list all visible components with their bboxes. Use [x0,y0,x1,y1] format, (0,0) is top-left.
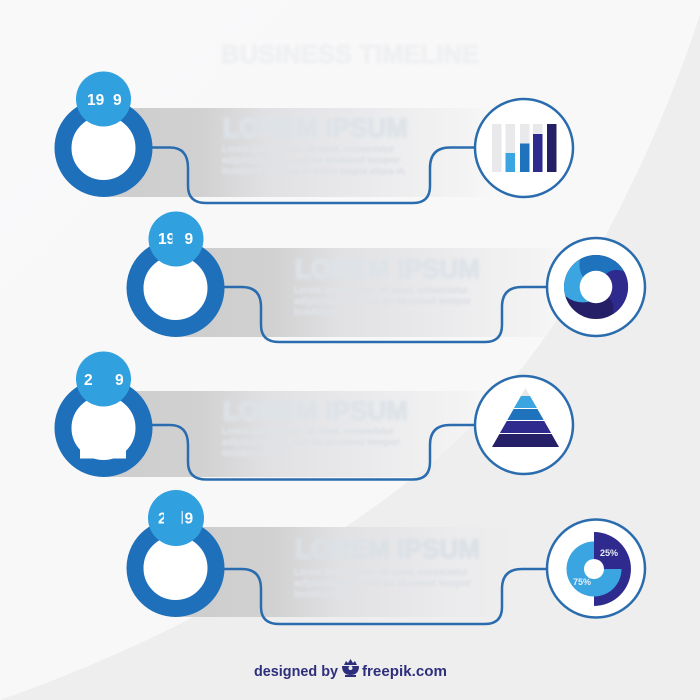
row 2 body text [294,285,472,317]
row 2 ring [135,248,216,328]
row 4 ring [135,528,216,608]
footer credit: freepik.com [362,664,447,680]
row 1 body text: Lorem ipsum dolor sit amet, consectetur [222,144,394,154]
icon: percentage pie [547,520,645,618]
icon: bar chart [475,99,573,197]
title: BUSINESS TIMELINE [221,39,479,69]
timeline row 2 [135,212,645,342]
row 2 year badge [148,212,204,266]
row 2 body text: Lorem ipsum dolor sit amet, consectetur [294,285,468,295]
label 25%: 25% [600,548,618,558]
row 1 body text: incididunt ut labore et dolore magna aliqua et. [222,166,406,176]
row 3 body text [222,426,401,458]
row 4 year badge [148,490,204,546]
row 2 body text: adipiscing elit, sed do eiusmod tempor [294,296,472,306]
row 1 band [103,108,495,197]
row 3 body text: adipiscing elit, sed do eiusmod tempor [222,437,401,447]
row 2 year badge: 9 [166,231,176,248]
row 1 body text: adipiscing elit, sed do eiusmod tempor [222,155,401,165]
row 1 ring [63,108,144,188]
row 4 year badge: 9 [184,510,194,528]
row 2 year badge: 9 [184,231,194,248]
row 2 heading: LOREM IPSUM [295,254,480,284]
icon: donut swirl [547,238,645,336]
row 3 body text: incididunt ut. [222,448,282,458]
timeline row 4 [135,490,645,624]
row 4 connector [222,569,548,624]
row 4 body text: Lorem ipsum dolor sit amet, consectetur [294,567,468,577]
row 3 year badge: 2 [84,372,93,389]
row 3 year badge: 9 [115,372,124,389]
row 4 body text [294,567,472,599]
row 3 year badge [76,352,131,406]
icon: freepik logo [342,659,359,677]
row 1 connector [150,148,476,203]
row 2 connector [222,287,548,342]
row 4 band [175,527,567,617]
row 2 year badge: 1 [158,231,167,248]
row 1 body text [222,144,406,176]
row 1 heading: LOREM IPSUM [223,113,408,143]
row 1 year badge [76,72,131,126]
row 4 body text: incididunt ut. [294,589,354,599]
row 3 heading: LOREM IPSUM [223,396,408,426]
row 4 heading: LOREM IPSUM [295,534,480,564]
label 75%: 75% [573,577,591,587]
row 2 body text: incididunt. [294,307,338,317]
icon: pyramid [475,376,573,474]
timeline row 1 [63,72,573,203]
row 3 band [103,391,495,477]
row 3 body text: Lorem ipsum dolor sit amet, consectetur [222,426,394,436]
footer credit [254,659,447,680]
row 4 year badge: 2 [158,510,167,528]
row 4 body text: adipiscing elit, sed do eiusmod tempor [294,578,472,588]
row 1 year badge: 19 [87,92,105,109]
timeline row 3 [63,352,573,480]
row 3 connector [150,425,476,480]
row 3 ring [63,388,144,468]
row 1 year badge: 9 [113,92,122,109]
footer credit: designed by [254,664,338,680]
row 2 band [175,248,567,337]
